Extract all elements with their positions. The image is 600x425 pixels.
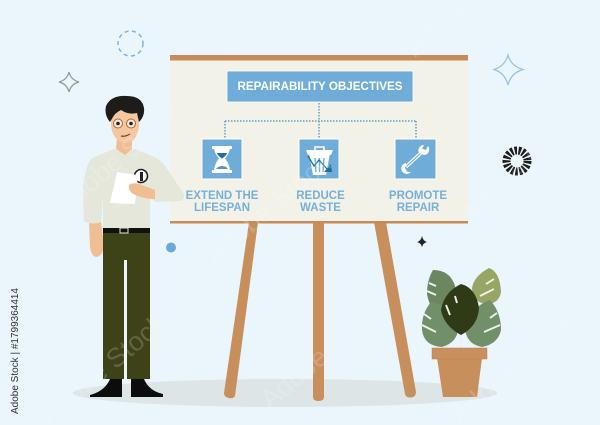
leaf: front left xyxy=(422,302,458,347)
stems xyxy=(446,335,476,348)
easel legs xyxy=(224,222,416,401)
heading: repairability objectives xyxy=(227,71,413,102)
neck xyxy=(116,138,132,155)
watermark: Adobe Stock xyxy=(455,108,592,230)
badge xyxy=(134,170,148,182)
leaf: front dark xyxy=(441,284,479,335)
leaf slits xyxy=(422,279,500,332)
pot xyxy=(437,358,482,397)
item: reduce waste: REDUCE xyxy=(296,190,345,202)
icon: trash bin with down arrow xyxy=(299,139,339,179)
shoes xyxy=(90,379,163,397)
watermark: Adobe Stock xyxy=(255,293,392,415)
decoration: blue sparkle xyxy=(494,55,523,85)
decoration: blue dot xyxy=(166,242,176,252)
presenter figure xyxy=(83,96,184,397)
belt xyxy=(103,228,150,233)
heading: repairability objectives: REPAIRABILITY OBJECTIVES xyxy=(238,81,403,93)
plant xyxy=(422,268,501,397)
item: reduce waste xyxy=(296,139,345,214)
leaf: back left xyxy=(427,270,455,316)
icon: wrench xyxy=(395,139,436,179)
hair xyxy=(106,96,144,122)
dotted connector lines xyxy=(225,103,416,138)
panel: presentation board xyxy=(170,55,468,224)
item: promote repair xyxy=(389,139,447,214)
decoration: black radial burst xyxy=(506,150,528,172)
item: promote repair: PROMOTE xyxy=(389,190,447,202)
icon: hourglass xyxy=(202,139,242,179)
face xyxy=(111,108,139,143)
watermark id text: Adobe Stock | #1799364414 xyxy=(9,288,21,414)
watermark: Adobe Stock xyxy=(50,98,187,220)
trousers xyxy=(103,232,150,379)
mouth xyxy=(121,134,130,136)
leaf: back right xyxy=(472,268,501,304)
watermark: Adobe Stock xyxy=(200,148,337,270)
left hand xyxy=(89,222,104,257)
glasses xyxy=(114,119,136,128)
item: reduce waste: WASTE xyxy=(300,202,341,214)
item: promote repair: REPAIR xyxy=(397,202,440,214)
decoration: small black star xyxy=(417,236,427,247)
decoration: dashed circle xyxy=(118,31,143,56)
item: extend the lifespan xyxy=(186,139,259,214)
leaf: front right xyxy=(465,300,501,347)
right hand xyxy=(129,183,155,199)
decoration: grey sparkle xyxy=(59,72,79,92)
item: extend the lifespan: EXTEND THE xyxy=(186,190,259,202)
shirt xyxy=(83,149,184,229)
floor shadow xyxy=(73,379,497,407)
item: extend the lifespan: LIFESPAN xyxy=(194,202,250,214)
paper xyxy=(110,172,138,204)
